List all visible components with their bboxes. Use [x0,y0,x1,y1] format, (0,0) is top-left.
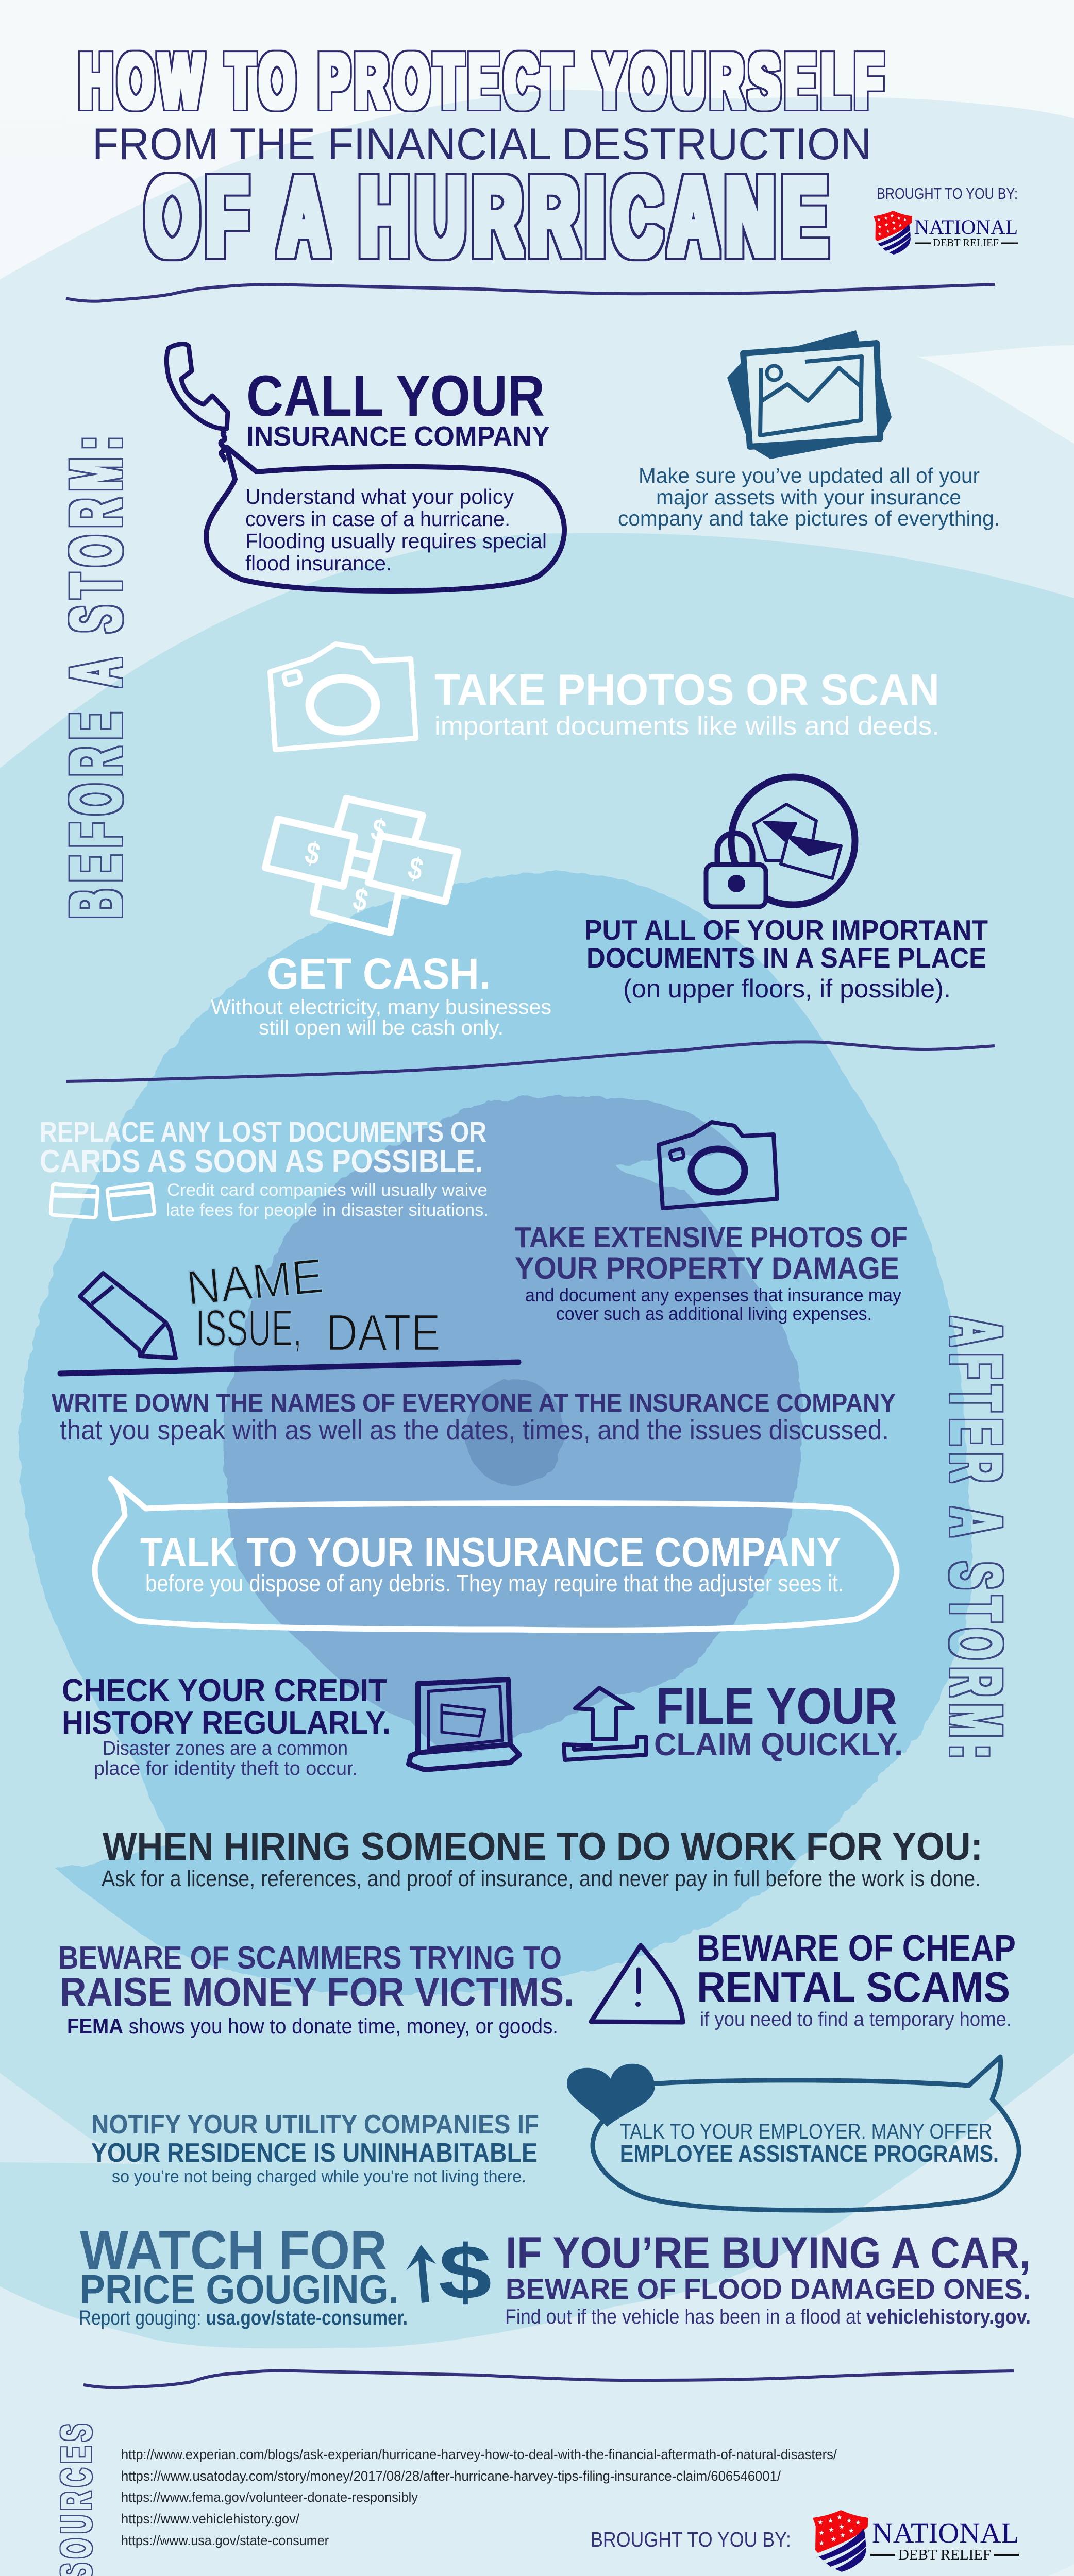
panel: talk to your insurance company: before you dispose of any debris. They may require that the adjuster sees it. [145,1570,844,1597]
panel: check credit history [62,1673,519,1780]
source links: https://www.usa.gov/state-consumer [121,2533,329,2548]
panel: write down names [52,1248,896,1446]
panel: call your insurance company: INSURANCE COMPANY [246,421,550,452]
panel: get cash [211,799,551,1039]
icon: warning triangle [591,1945,683,2022]
icon: dollar bills: $ [405,850,426,887]
source links: https://www.usatoday.com/story/money/2017/08/28/after-hurricane-harvey-tips-filing-insurance-claim/606546001/ [121,2468,781,2484]
panel: rental scams: BEWARE OF CHEAP [697,1928,1016,1969]
icon: dollar bills [265,799,458,933]
speech bubble [593,2057,1019,2210]
panel: call your insurance company: CALL YOUR [246,364,545,428]
panel: watch for price gouging [79,2219,492,2329]
icon: pencil [80,1273,176,1358]
panel: check credit history: CHECK YOUR CREDIT [62,1673,387,1708]
panel: safe place: PUT ALL OF YOUR IMPORTANT [584,914,988,946]
panel: beware of scammers: BEWARE OF SCAMMERS TRYING TO [58,1940,562,1976]
vertical heading: before a storm: BEFORE A STORM: [55,428,136,918]
icon: dollar bills: $ [302,835,323,872]
panel: replace lost documents: REPLACE ANY LOST DOCUMENTS OR [40,1115,486,1148]
panel: when hiring someone [102,1825,983,1891]
panel: replace lost documents: Credit card companies will usually waive [167,1180,488,1200]
panel: notify utility companies [91,2110,539,2187]
panel: update assets: Make sure you’ve updated all of your [639,464,980,487]
panel: buying a car: IF YOU’RE BUYING A CAR, [506,2228,1031,2278]
icon: laptop [409,1680,519,1770]
panel: check credit history: HISTORY REGULARLY. [62,1705,391,1741]
panel: talk to your employer: TALK TO YOUR EMPLOYER. MANY OFFER [620,2119,992,2143]
speech bubble [95,1479,897,1630]
handwritten note: ISSUE, [196,1299,302,1357]
panel: file your claim quickly: CLAIM QUICKLY. [654,1727,903,1762]
panel: take extensive photos: YOUR PROPERTY DAMAGE [515,1251,899,1285]
panel: file your claim quickly [564,1677,903,1762]
brought to you by with logo (bottom): BROUGHT TO YOU BY: [591,2528,791,2551]
handwritten note [184,1248,441,1362]
source links [121,2447,837,2548]
icon: credit cards [51,1183,155,1219]
panel: get cash: Without electricity, many businesses [211,996,551,1019]
icon: navy camera [659,1122,777,1208]
icon: dollar bills: $ [350,881,371,918]
panel: take photos or scan: important documents like wills and deeds. [434,711,939,740]
brought to you by with logo (top) [874,184,1018,255]
icon: arrow and dollar sign: $ [439,2229,492,2315]
panel: write down names: that you speak with as well as the dates, times, and the issues discussed. [60,1415,889,1446]
bubble text: flood insurance. [245,551,392,575]
panel: rental scams [697,1928,1016,2030]
panel: rental scams: RENTAL SCAMS [697,1963,1010,2011]
panel: take extensive photos: cover such as additional living expenses. [556,1303,872,1324]
panel: watch for price gouging: WATCH FOR [80,2219,387,2281]
panel: get cash: GET CASH. [267,950,491,998]
panel: rental scams: if you need to find a temporary home. [700,2009,1012,2030]
icon: telephone [166,344,228,461]
handwritten note: DATE [326,1304,441,1362]
panel: when hiring someone: WHEN HIRING SOMEONE TO DO WORK FOR YOU: [103,1825,983,1869]
icon: dollar bills: $ [368,811,389,849]
panel: notify utility companies: YOUR RESIDENCE IS UNINHABITABLE [91,2138,538,2168]
panel: update assets: company and take pictures of everything. [618,506,1000,530]
panel: buying a car: BEWARE OF FLOOD DAMAGED ONES. [506,2273,1031,2305]
panel: take photos or scan: TAKE PHOTOS OR SCAN [434,666,939,715]
panel: get cash: still open will be cash only. [259,1016,504,1039]
source links: https://www.fema.gov/volunteer-donate-responsibly [121,2489,418,2505]
panel: check credit history: Disaster zones are a common [103,1738,348,1759]
panel: write down names: WRITE DOWN THE NAMES OF EVERYONE AT THE INSURANCE COMPANY [52,1388,896,1417]
panel: replace lost documents: CARDS AS SOON AS POSSIBLE. [40,1144,483,1179]
panel: when hiring someone: Ask for a license, references, and proof of insurance, and never pay in full before the work is done. [102,1866,981,1891]
panel: beware of scammers [58,1940,574,2038]
panel: take extensive photos [515,1122,908,1324]
panel: beware of scammers: RAISE MONEY FOR VICTIMS. [60,1969,574,2014]
brought to you by with logo (bottom) [591,2510,1019,2572]
speech bubble [206,447,564,591]
panel: watch for price gouging: Report gouging: usa.gov/state-consumer. [79,2307,408,2329]
panel: update assets [618,330,1000,530]
panel: talk to your employer [567,2057,1019,2210]
panel: file your claim quickly: FILE YOUR [656,1677,897,1735]
panel: safe place: DOCUMENTS IN A SAFE PLACE [586,942,986,974]
panel: notify utility companies: NOTIFY YOUR UTILITY COMPANIES IF [91,2110,539,2140]
panel: talk to your insurance company: TALK TO YOUR INSURANCE COMPANY [140,1529,841,1575]
source links: http://www.experian.com/blogs/ask-experian/hurricane-harvey-how-to-deal-with-the-financial-aftermath-of-natural-disasters/ [121,2447,837,2462]
panel: take extensive photos: TAKE EXTENSIVE PHOTOS OF [515,1221,908,1254]
bubble text [245,485,547,575]
vertical heading: after a storm: AFTER A STORM: [936,1317,1017,1767]
panel: notify utility companies: so you’re not being charged while you’re not living there. [112,2167,526,2187]
panel: safe place [584,777,988,1003]
panel: beware of scammers: FEMA shows you how to donate time, money, or goods. [67,2014,558,2038]
brought to you by with logo (top): BROUGHT TO YOU BY: [877,184,1018,202]
panel: talk to your insurance company [95,1479,897,1630]
brought to you by with logo (bottom): NATIONAL [872,2517,1019,2549]
bubble text: covers in case of a hurricane. [245,507,510,531]
panel: buying a car: Find out if the vehicle has been in a flood at vehiclehistory.gov. [505,2306,1031,2328]
title: FROM THE FINANCIAL DESTRUCTION [92,120,871,169]
source links: https://www.vehiclehistory.gov/ [121,2511,299,2527]
vertical heading: sources: SOURCES [52,2419,100,2576]
title [79,39,888,278]
bubble text: Understand what your policy [245,485,514,509]
panel: update assets: major assets with your insurance [656,485,961,509]
panel: watch for price gouging: PRICE GOUGING. [80,2266,399,2312]
icon: heart [567,2064,655,2127]
icon: upload arrow [564,1688,646,1760]
icon: white camera [270,644,416,750]
brought to you by with logo (bottom): DEBT RELIEF [898,2547,991,2563]
panel: talk to your employer: EMPLOYEE ASSISTANCE PROGRAMS. [620,2140,999,2167]
icon: lock and envelopes [706,777,855,907]
handwritten note: NAME [184,1248,326,1316]
panel: replace lost documents: late fees for people in disaster situations. [166,1200,489,1220]
panel: call your insurance company [166,344,564,591]
panel: check credit history: place for identity theft to occur. [94,1758,358,1780]
brought to you by with logo (top): NATIONAL [914,215,1018,239]
panel: take photos or scan [270,644,939,750]
panel: buying a car [505,2228,1031,2328]
panel: safe place: (on upper floors, if possible). [623,974,951,1003]
brought to you by with logo (top): DEBT RELIEF [933,236,999,249]
panel: replace lost documents [40,1115,489,1220]
icon: photos [727,330,892,459]
bubble text: Flooding usually requires special [245,529,547,553]
panel: take extensive photos: and document any expenses that insurance may [525,1284,901,1306]
icon: arrow and dollar sign [406,2229,492,2315]
